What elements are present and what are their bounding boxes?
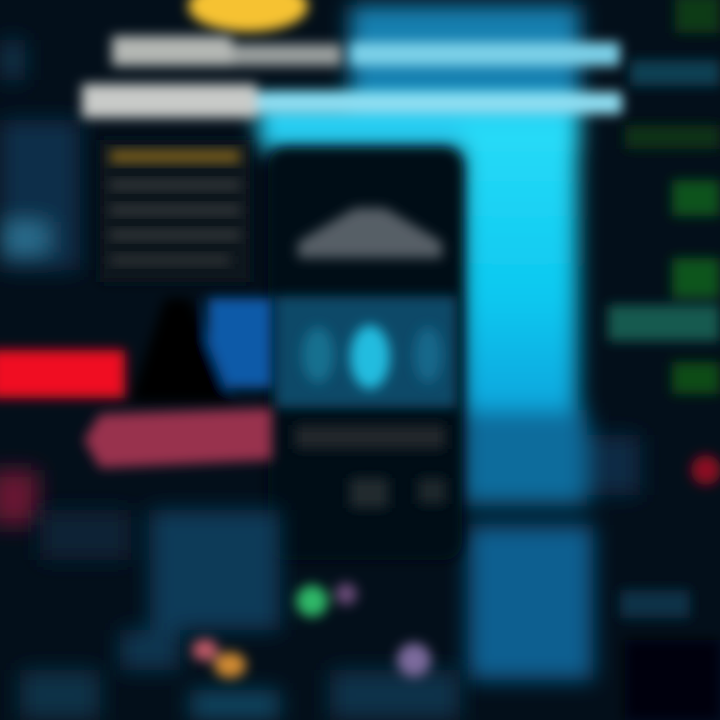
dark red block <box>0 470 38 525</box>
green and pink icon <box>296 583 357 617</box>
black bottom right block <box>625 640 720 720</box>
text card with yellow header <box>100 140 250 282</box>
phone mockup <box>268 148 462 560</box>
yellow sun icon <box>188 0 308 32</box>
blue callout and dark triangle <box>130 298 272 402</box>
phone heading text <box>298 208 442 258</box>
title <box>82 36 622 118</box>
lower left blue blocks <box>20 510 460 720</box>
red dot <box>691 455 720 485</box>
lilac icon <box>397 643 431 677</box>
orange and pink icon <box>192 639 246 678</box>
phone lower section <box>295 425 446 508</box>
pink bar <box>84 408 272 468</box>
phone stats band <box>275 296 457 408</box>
right column items <box>608 0 720 618</box>
left sidebar panel <box>0 40 80 270</box>
cyan backdrop panel <box>258 5 640 680</box>
red bar <box>0 350 125 398</box>
